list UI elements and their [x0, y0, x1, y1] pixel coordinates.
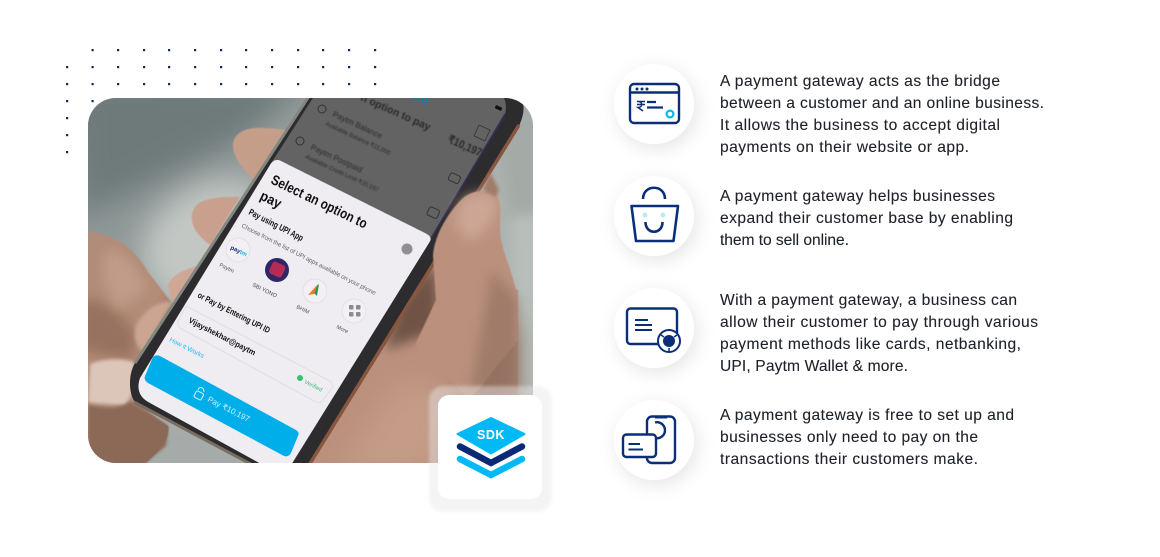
payment sheet: Pay ₹10,197 — [206, 395, 252, 424]
text: feature 1 — [720, 73, 1044, 156]
phone body — [130, 90, 524, 470]
dimmed screen text: Paytm Balance — [331, 110, 384, 141]
payment sheet: Choose from the list of UPI apps available on your phone — [240, 223, 377, 297]
feature 2: expand customer base — [614, 176, 694, 256]
payment sheet — [138, 160, 431, 470]
text: feature 2: expand their customer base by enabling — [720, 210, 1013, 227]
payment sheet: pay — [258, 187, 285, 211]
text: feature 1: payments on their website or app. — [720, 139, 969, 156]
icon: browser window with rupee — [614, 64, 694, 144]
text: feature 3: UPI, Paytm Wallet & more. — [720, 358, 908, 375]
text: feature 3: payment methods like cards, netbanking, — [720, 336, 1021, 353]
text: feature 4: transactions their customers make. — [720, 451, 978, 468]
text: feature 2 — [720, 188, 1013, 249]
payment sheet: Select an option to — [269, 171, 370, 231]
dimmed screen text: ₹10,197 — [446, 134, 484, 159]
payment sheet: Vijayshekhar@paytm — [187, 316, 257, 357]
payment sheet: How it Works — [168, 337, 206, 360]
dimmed screen text: n option to pay — [359, 92, 433, 133]
dimmed screen text: Available Credit Limit ₹20,197 — [304, 153, 380, 194]
payment sheet: Pay using UPI App — [247, 207, 305, 243]
feature 1: digital payments — [614, 64, 694, 144]
icon: SDK stacked layers: SDK — [477, 428, 505, 442]
right thumb — [415, 191, 518, 400]
payment sheet: Verified — [303, 379, 323, 394]
text: feature 3: allow their customer to pay through various — [720, 314, 1038, 331]
UPI app icons — [226, 238, 250, 262]
text: feature 1: A payment gateway acts as the bridge — [720, 73, 1000, 90]
dot grid decoration — [66, 49, 376, 153]
icon: card with payment badge — [614, 288, 694, 368]
thumbnail — [88, 359, 135, 405]
payment sheet: or Pay by Entering UPI ID — [196, 290, 272, 335]
feature 4: free to set up — [614, 400, 694, 480]
text: feature 1: between a customer and an online business. — [720, 95, 1044, 112]
text: feature 2: A payment gateway helps businesses — [720, 188, 995, 205]
SDK badge — [429, 386, 552, 512]
payment sheet: paytm — [229, 245, 248, 258]
dimmed screen text — [304, 98, 483, 191]
text: feature 4 — [720, 407, 1014, 468]
payment sheet: SBI YONO — [251, 282, 278, 300]
text: feature 2: them to sell online. — [720, 232, 849, 249]
right hand palm — [312, 266, 518, 463]
payment sheet: More — [335, 324, 349, 335]
icon: phone and card — [614, 400, 694, 480]
pay button — [145, 355, 299, 456]
phone dimmed screen — [270, 90, 506, 240]
text: feature 4: businesses only need to pay on the — [720, 429, 978, 446]
text: feature 3: With a payment gateway, a business can — [720, 292, 1017, 309]
icon: smiling shopping bag — [614, 176, 694, 256]
dimmed screen text: Available Balance ₹11,000 — [324, 120, 392, 157]
payment sheet: BHIM — [295, 304, 310, 316]
text: feature 1: It allows the business to accept digital — [720, 117, 1000, 134]
text: feature 4: A payment gateway is free to set up and — [720, 407, 1014, 424]
feature 3: payment methods — [614, 288, 694, 368]
text: feature 3 — [720, 292, 1038, 375]
photo: hand holding phone with payment screen — [88, 98, 533, 463]
payment sheet: Paytm — [218, 262, 235, 275]
left hand — [88, 127, 286, 463]
dimmed screen text: tm — [410, 87, 432, 108]
dimmed screen text: Paytm Postpaid — [309, 143, 364, 174]
